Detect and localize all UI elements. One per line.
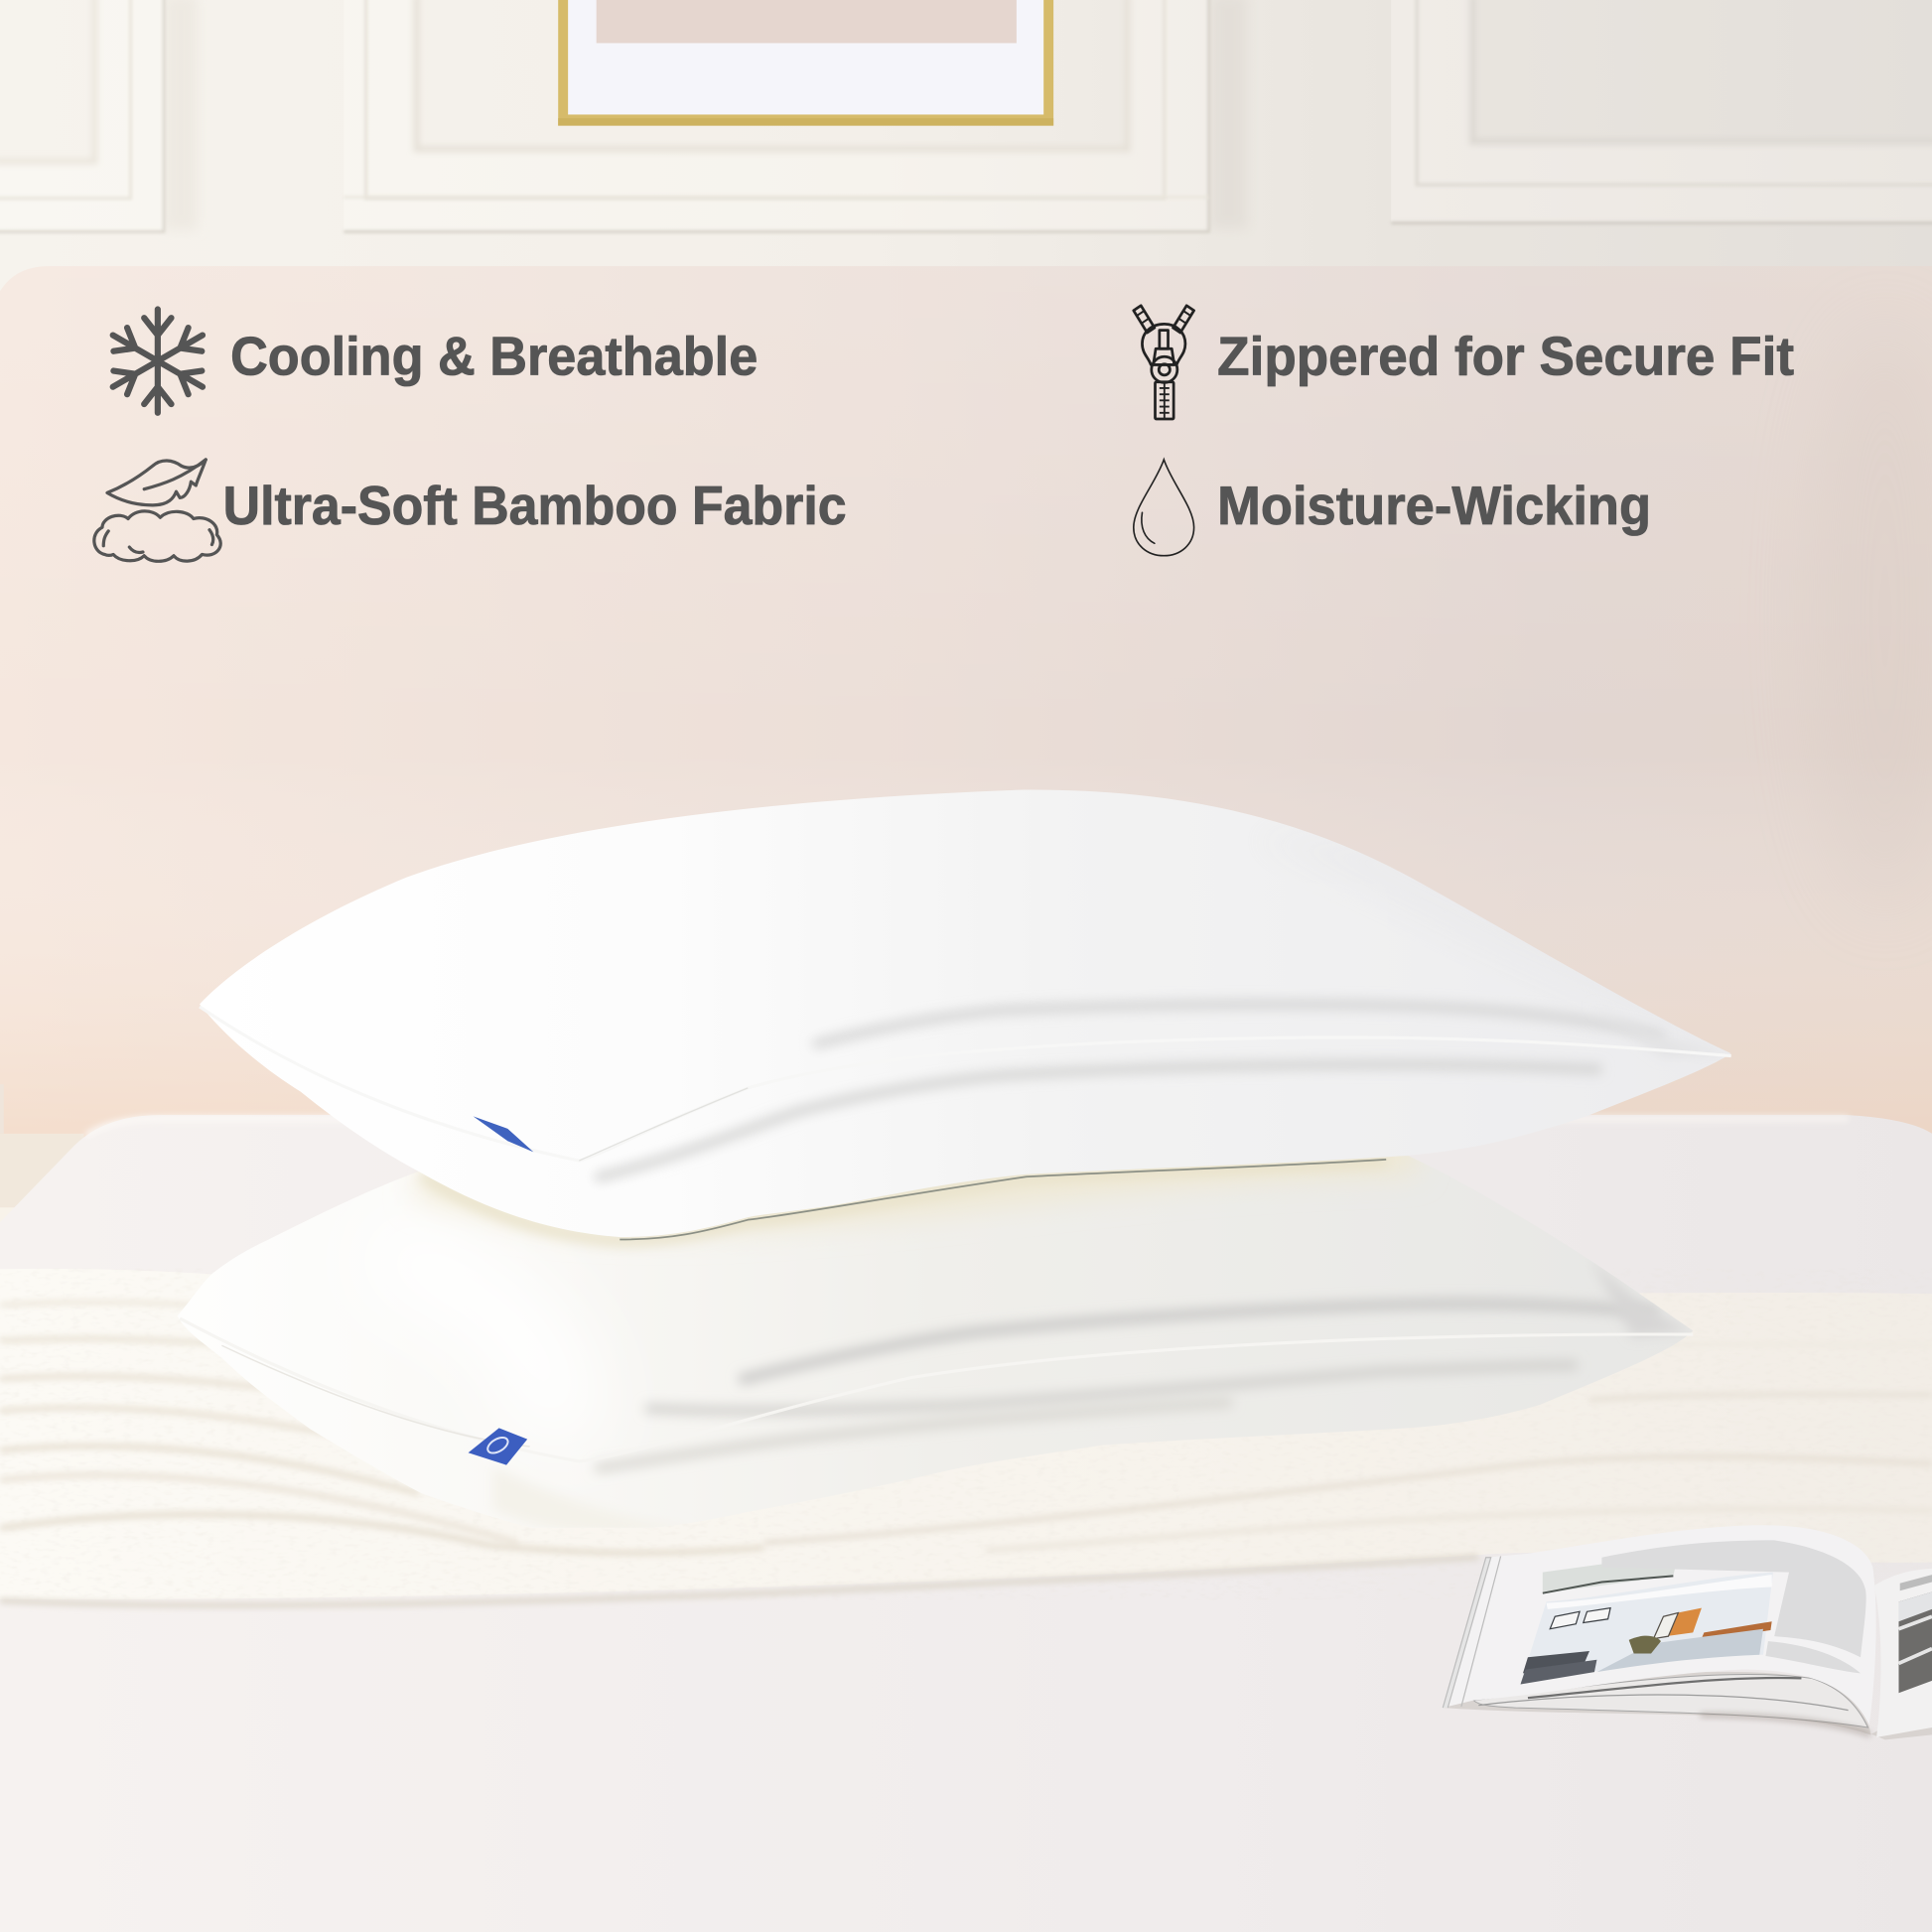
moulding: right panel: [1391, 0, 1932, 223]
label: bamboo fabric: Ultra-Soft Bamboo Fabric: [223, 476, 847, 536]
mattress: [0, 1115, 1932, 1932]
headboard: [0, 266, 1932, 1146]
picture frame: [558, 0, 1053, 126]
nightstand edge: [0, 1084, 83, 1257]
lower pillow label tag: [469, 1428, 527, 1465]
icon: feather and cloud: [94, 460, 220, 561]
label: cooling: Cooling & Breathable: [230, 326, 758, 386]
magazine small photo: [1543, 1554, 1678, 1593]
lower pillow: [178, 1156, 1693, 1534]
feature: zippered for secure fit: [1134, 306, 1794, 419]
blanket folds: [0, 1302, 1932, 1605]
label: moisture-wicking: Moisture-Wicking: [1217, 476, 1651, 536]
moulding: centre panel: [344, 0, 1247, 231]
lower pillow zip seam: [180, 1318, 1693, 1461]
icon: snowflake: [106, 310, 209, 413]
knit throw blanket: [0, 1269, 1932, 1605]
magazine text columns: [1601, 1540, 1866, 1657]
magazine right page: [1874, 1569, 1932, 1737]
lower pillow shading: [369, 1156, 1693, 1534]
feature: ultra-soft bamboo fabric: [94, 460, 847, 561]
feature: cooling and breathable: [106, 310, 758, 413]
label: zippered: Zippered for Secure Fit: [1217, 326, 1794, 386]
upper pillow hidden tag: [474, 1116, 533, 1152]
icon: water drop: [1134, 460, 1194, 556]
wall with moulding: [0, 0, 1932, 296]
magazine left page: [1443, 1525, 1876, 1725]
moulding: left panel: [0, 0, 198, 231]
upper pillow: [200, 789, 1731, 1241]
feature: moisture-wicking: [1134, 460, 1651, 556]
icon: zipper: [1134, 306, 1194, 419]
magazine page stack: [1443, 1672, 1932, 1739]
upper pillow shading: [593, 997, 1682, 1185]
open magazine: [1443, 1525, 1932, 1739]
upper pillow zip seam: [200, 1007, 1731, 1161]
magazine main photo: [1520, 1573, 1773, 1685]
